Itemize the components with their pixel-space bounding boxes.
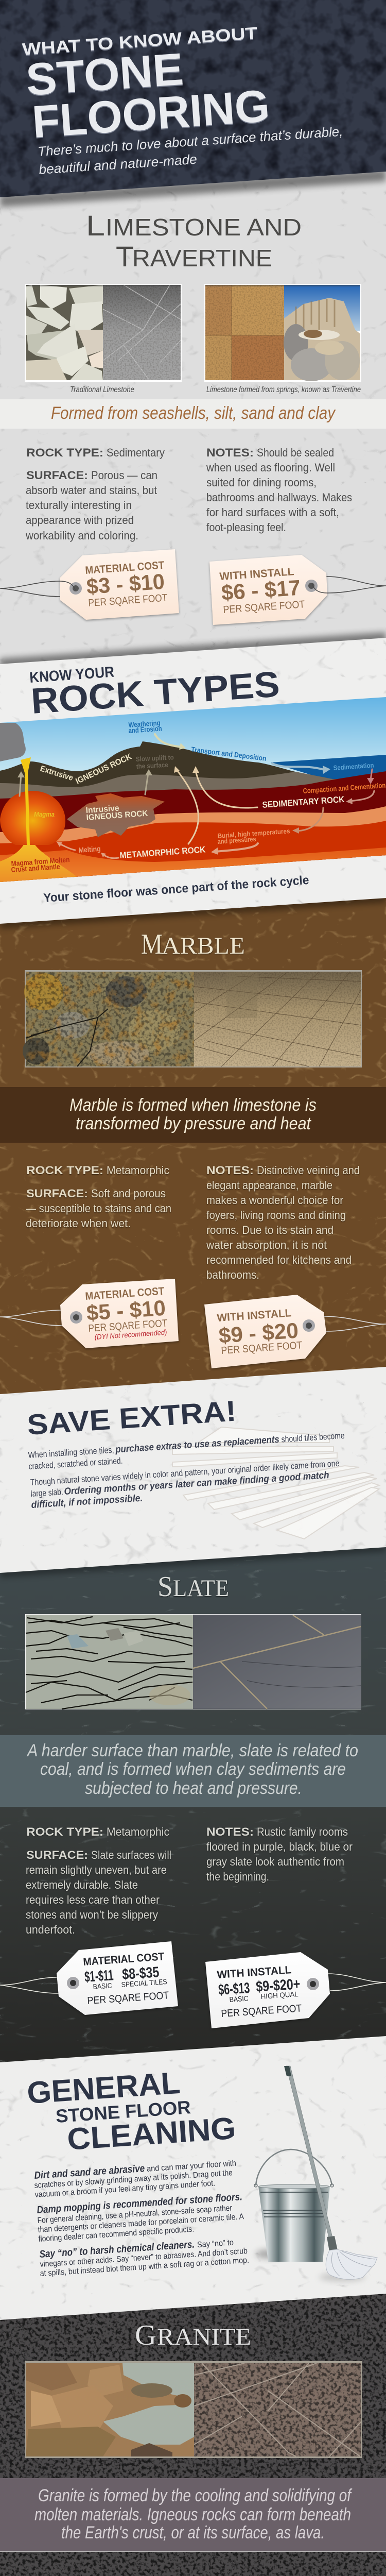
diagram labels: Intrusive — [85, 804, 119, 815]
panel: limestone and travertine — [0, 155, 386, 675]
price tag: with install: PER SQARE FOOT — [223, 599, 305, 616]
text: notes: NOTES: — [206, 1164, 254, 1177]
panel: marble — [0, 891, 386, 1406]
text: rock type and surface: underfoot. — [26, 1923, 75, 1936]
text: damp mopping: flooring dealer can recommend specific products. — [38, 2225, 195, 2244]
heading: limestone and travertine: RAVERTINE — [132, 245, 272, 272]
text: rock type and surface: ROCK TYPE: — [26, 1825, 103, 1838]
band: marble formation: transformed by pressure and heat — [76, 1114, 311, 1133]
price tag: with install: BASIC — [229, 1994, 249, 2004]
heading: general stone floor cleaning — [26, 2065, 237, 2157]
text: rock type and surface: stones and won’t be slippery — [26, 1908, 158, 1921]
price tag: with install: $6-$13 — [218, 1980, 250, 1998]
text: notes: water absorption, it is not — [206, 1239, 327, 1251]
heading: general stone floor cleaning: GENERAL — [26, 2065, 181, 2110]
heading: slate: S — [157, 1571, 173, 1603]
text: notes: floored in purple, black, blue or — [206, 1840, 353, 1853]
price tag: material cost: $5 - $10 — [85, 1296, 166, 1325]
diagram labels: IGNEOUS ROCK — [86, 809, 148, 822]
diagram labels: the surface — [136, 761, 168, 770]
text: notes: NOTES: — [206, 446, 254, 459]
price tag: material cost — [0, 1279, 179, 1348]
diagram labels: Magma from Molten — [11, 855, 70, 868]
diagram labels — [11, 719, 386, 874]
text: rock type and surface: Metamorphic — [107, 1825, 169, 1838]
diagram labels: Sedimentation — [333, 761, 374, 772]
text: dirt and sand — [34, 2157, 237, 2199]
text: notes: suited for dining rooms, — [206, 476, 317, 489]
text: notes: when used as flooring. Well — [206, 461, 335, 474]
photo captions: Traditional Limestone — [70, 385, 134, 394]
band: slate formation: subjected to heat and pressure. — [85, 1778, 302, 1798]
text: rock type and surface: — susceptible to stains and can — [26, 1202, 171, 1215]
intrusive igneous rock blob — [67, 793, 165, 837]
text: rock type and surface: ROCK TYPE: — [26, 1164, 103, 1177]
text: damp mopping — [37, 2191, 244, 2244]
heading: marble: M — [141, 928, 163, 960]
text: notes: Should be sealed — [257, 446, 334, 459]
text: dirt and sand: scratches or by slowly grinding away at its polish. Drag out the — [34, 2168, 233, 2190]
text: notes — [206, 446, 352, 534]
photo: slate rock and floor — [25, 1614, 361, 1709]
text: purchase extras: cracked, scratched or stained. — [28, 1456, 123, 1471]
subtitle: beautiful and nature-made — [38, 151, 198, 177]
price tag: with install: HIGH QUAL — [260, 1990, 299, 2001]
heading: granite: G — [135, 2319, 156, 2351]
diagram labels: Extrusive — [39, 765, 74, 783]
text: purchase extras: should tiles become — [281, 1431, 345, 1444]
text: notes: Distinctive veining and — [257, 1164, 360, 1177]
text: harsh chemicals — [39, 2236, 249, 2278]
text: notes: rooms. Due to its stain and — [206, 1224, 334, 1236]
price tag: material cost: MATERIAL COST — [85, 1285, 165, 1302]
price tag: with install: $9-$20+ — [255, 1976, 301, 1995]
text: rock type and surface: Sedimentary — [107, 446, 165, 459]
panel: slate — [0, 1540, 386, 2071]
diagram labels: Melting — [78, 844, 101, 854]
heading: save extra: SAVE EXTRA! — [26, 1394, 237, 1441]
text: notes — [206, 1825, 353, 1883]
text: notes: gray slate look authentic from — [206, 1855, 344, 1868]
heading: limestone and travertine — [86, 209, 302, 273]
price tag: material cost: PER SQARE FOOT — [88, 592, 168, 609]
heading: limestone and travertine: T — [116, 240, 134, 273]
band: slate formation: A harder surface than marble, slate is related to — [26, 1741, 358, 1760]
price tag: with install: PER SQARE FOOT — [221, 2003, 302, 2020]
text: rock type and surface: SURFACE: — [26, 1187, 88, 1200]
price tag: material cost — [0, 549, 179, 620]
text: notes — [206, 1164, 360, 1281]
illustration: fan of stone tiles — [172, 1427, 379, 1539]
text: notes: Rustic family rooms — [257, 1825, 348, 1838]
text: notes: bathrooms and hallways. Makes — [206, 491, 352, 504]
band: formed from seashells — [0, 399, 386, 429]
text: purchase extras: When installing stone tiles, — [28, 1445, 114, 1460]
price tag: material cost: PER SQARE FOOT — [87, 1990, 169, 2007]
text: rock type and surface: remain slightly uneven, but are — [26, 1863, 167, 1876]
photo: marble rock and floor — [23, 970, 362, 1067]
price tag: material cost: PER SQARE FOOT — [88, 1318, 168, 1334]
panel: page header — [0, 0, 386, 207]
text: damp mopping: than detergents or cleaners made for porcelain or ceramic tile. A — [38, 2212, 244, 2234]
text: rock type and surface: extremely durable. Slate — [26, 1878, 138, 1891]
photo: granite rocks and floor — [25, 2361, 362, 2458]
text: damp mopping: Damp mopping is recommended for stone floors. — [37, 2191, 242, 2216]
price tag: with install — [205, 1952, 386, 2028]
price tag: material cost: MATERIAL COST — [83, 1951, 165, 1968]
price tag: with install: $6 - $17 — [220, 575, 301, 605]
panel: general stone floor cleaning — [0, 2036, 386, 2320]
price tag: material cost: $3 - $10 — [85, 569, 165, 599]
diagram labels: Magma — [34, 810, 55, 818]
subtitle: There’s much to love about a surface that’s durable, — [37, 124, 343, 159]
diagram labels: METAMORPHIC ROCK — [119, 844, 206, 860]
text: ordering later: large slab. — [30, 1487, 63, 1499]
band: granite formation — [0, 2478, 386, 2552]
text: rock type and surface: Soft and porous — [91, 1187, 166, 1200]
price tag: material cost: SPECIAL TILES — [121, 1977, 167, 1989]
price tag: material cost: $8-$35 — [121, 1964, 160, 1983]
text: notes: the beginning. — [206, 1870, 269, 1883]
text: rock type and surface: deteriorate when wet. — [26, 1217, 131, 1230]
text: purchase extras — [28, 1430, 345, 1471]
text: purchase extras: purchase extras to use as replacements — [115, 1434, 279, 1455]
text: notes: foyers, living rooms and dining — [206, 1209, 346, 1222]
band: marble formation — [0, 1087, 386, 1143]
text: rock type and surface: SURFACE: — [26, 1849, 88, 1861]
band: slate formation — [0, 1735, 386, 1807]
text: dirt and sand: Dirt and sand are abrasive — [34, 2163, 145, 2181]
heading: granite: RANITE — [157, 2324, 251, 2350]
heading: limestone and travertine: IMESTONE AND — [106, 214, 302, 241]
title: FLOORING — [30, 80, 271, 147]
text: harsh chemicals: Say “no” to — [197, 2239, 234, 2249]
price tag: with install: WITH INSTALL — [217, 1964, 292, 1981]
text: rock type and surface: texturally interesting in — [26, 499, 132, 512]
panel: save extra — [0, 1367, 386, 1578]
text: rock type and surface: requires less care than other — [26, 1893, 160, 1906]
text: notes: elegant appearance, marble — [206, 1179, 332, 1192]
heading: slate: LATE — [173, 1575, 229, 1602]
diagram labels: Weathering — [128, 719, 161, 729]
heading: know your rock types: ROCK TYPES — [30, 664, 281, 721]
text: rock type and surface: SURFACE: — [26, 469, 88, 482]
text: rock type and surface — [26, 1164, 171, 1230]
text: notes: bathrooms. — [206, 1268, 259, 1281]
price tag: material cost: $1-$11 — [84, 1967, 114, 1986]
diagram labels: Slow uplift to — [135, 753, 174, 763]
text: dirt and sand: and can mar your floor with — [147, 2159, 236, 2174]
text: notes: foot-pleasing feel. — [206, 521, 286, 534]
band: granite formation: the Earth's crust, or at its surface, as lava. — [61, 2523, 325, 2543]
heading: general stone floor cleaning: CLEANING — [66, 2111, 237, 2157]
diagram labels: and Erosion — [128, 724, 162, 735]
text: rock type and surface: Slate surfaces will — [91, 1849, 171, 1861]
text: dirt and sand: vacuum or a broom if you feel any tiny grains under foot. — [34, 2179, 216, 2199]
text: notes: recommended for kitchens and — [206, 1253, 352, 1266]
title — [22, 23, 271, 147]
heading: marble: ARBLE — [162, 933, 245, 959]
price tag: material cost: BASIC — [93, 1981, 112, 1991]
band: slate formation: coal, and is formed when clay sediments are — [40, 1759, 346, 1779]
diagram labels: and pressures — [217, 835, 256, 845]
chart: rock cycle diagram — [0, 696, 386, 886]
text: rock type and surface — [25, 446, 165, 542]
text: rock type and surface: Metamorphic — [107, 1164, 169, 1177]
price tag: material cost — [0, 1941, 178, 2015]
text: harsh chemicals: Say “no” to harsh chemical cleaners. — [39, 2239, 195, 2260]
text: harsh chemicals: vinegars or other acids. Say “never” to abrasives. And don’t scrub — [40, 2247, 248, 2269]
text: harsh chemicals: at spills, but instead blot them up with a soft rag or a cotton mop. — [40, 2256, 249, 2278]
title: STONE — [24, 43, 185, 105]
price tag: with install: $9 - $20 — [218, 1318, 299, 1348]
price tag: with install: WITH INSTALL — [219, 566, 294, 583]
text: ordering later: Ordering months or years later can make finding a good match — [64, 1470, 329, 1497]
price tag: with install — [209, 555, 386, 625]
text: notes: makes a wonderful choice for — [206, 1194, 343, 1207]
heading: general stone floor cleaning: STONE FLOOR — [55, 2096, 191, 2127]
price tag: with install: WITH INSTALL — [217, 1307, 292, 1324]
icon: bucket and mop — [254, 2066, 377, 2281]
price tag: with install — [204, 1295, 386, 1368]
photo: travertine — [204, 284, 361, 382]
subtitle — [37, 124, 343, 177]
diagram labels: SEDIMENTARY ROCK — [262, 794, 345, 810]
text: rock type and surface — [26, 1825, 171, 1936]
price tag: material cost: MATERIAL COST — [85, 560, 165, 577]
text: damp mopping: For general cleaning, use a pH-neutral, stone-safe soap rather — [37, 2204, 233, 2225]
photo captions — [70, 385, 361, 394]
text: ordering later: difficult, if not impossible. — [31, 1493, 143, 1511]
text: notes: for hard surfaces with a soft, — [206, 506, 339, 519]
text: rock type and surface: absorb water and stains, but — [26, 484, 157, 497]
text: rock type and surface: ROCK TYPE: — [26, 446, 103, 459]
panel: granite — [0, 2287, 386, 2576]
diagram labels: Burial, high temperatures — [217, 827, 290, 840]
photo: traditional limestone — [25, 284, 182, 382]
diagram labels: Transport and Deposition — [191, 745, 267, 762]
diagram labels: IGNEOUS ROCK — [75, 752, 133, 786]
band: formed from seashells: Formed from seashells, silt, sand and clay — [51, 403, 336, 423]
text: rock type and surface: Porous — can — [91, 469, 157, 482]
text: rock type and surface: workability and coloring. — [25, 529, 138, 542]
band: marble formation: Marble is formed when limestone is — [69, 1095, 317, 1115]
text: rock type and surface: appearance with prized — [26, 514, 134, 527]
heading: know your rock types: KNOW YOUR — [29, 664, 115, 686]
title: WHAT TO KNOW ABOUT — [22, 23, 258, 59]
price tag: material cost: (DYI Not recommended) — [94, 1328, 167, 1341]
text: ordering later — [30, 1459, 340, 1511]
diagram labels: Crust and Mantle — [11, 862, 60, 874]
heading: limestone and travertine: L — [86, 209, 105, 242]
panel: know your rock types — [0, 632, 386, 928]
text: notes: NOTES: — [206, 1825, 254, 1838]
arrows — [20, 734, 374, 858]
price tag: with install: PER SQARE FOOT — [221, 1340, 303, 1357]
caption: rock cycle: Your stone floor was once part of the rock cycle — [43, 873, 309, 905]
